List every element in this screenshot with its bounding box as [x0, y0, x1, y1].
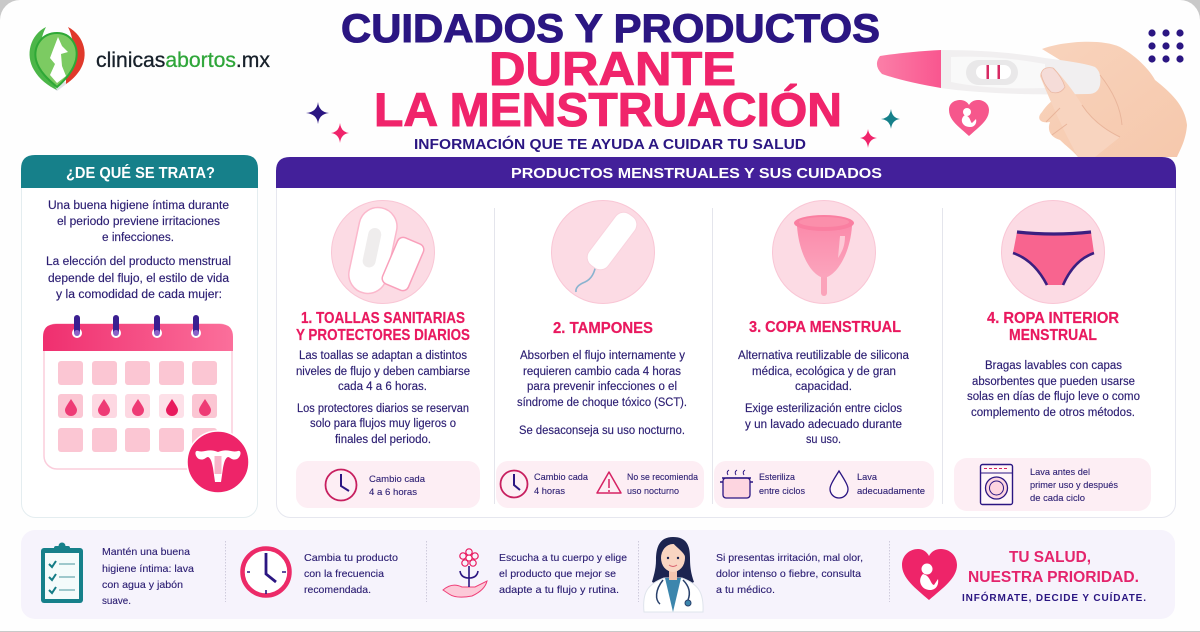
text: recomendada. — [304, 584, 371, 596]
text: higiene íntima: lava — [102, 563, 194, 575]
description: Bragas lavables con capas — [985, 360, 1122, 372]
tip chip: 4 horas — [534, 486, 565, 497]
heading: Y PROTECTORES DIARIOS — [296, 327, 470, 344]
icon: sanitary pad and liner — [332, 200, 434, 304]
description: absorbentes que pueden usarse — [972, 376, 1135, 388]
text — [102, 546, 194, 607]
product 4: ropa interior — [954, 200, 1151, 511]
tip chip: uso nocturno — [627, 486, 679, 497]
text: suave. — [102, 595, 131, 607]
description: Los protectores diarios se reservan — [297, 403, 469, 415]
text: con la frecuencia — [304, 568, 384, 580]
title: DURANTE — [489, 42, 736, 95]
tip: change product — [242, 548, 398, 596]
icon: heart with baby — [902, 549, 957, 600]
title: CUIDADOS Y PRODUCTOS — [341, 7, 880, 51]
title — [341, 7, 880, 136]
column separators — [494, 208, 942, 504]
text: a tu médico. — [716, 584, 775, 596]
heading — [987, 310, 1119, 344]
intro text: depende del flujo, el estilo de vida — [48, 273, 230, 285]
tip chip: No se recomienda — [627, 472, 699, 483]
icon: clipboard — [41, 542, 83, 603]
tip chip — [714, 461, 934, 508]
heading: 4. ROPA INTERIOR — [987, 310, 1119, 327]
tip chip — [296, 461, 480, 508]
panel: de que se trata — [21, 155, 258, 518]
intro text: y la comodidad de cada mujer: — [56, 289, 222, 301]
panel: bottom tips — [21, 530, 1175, 619]
text: dolor intenso o fiebre, consulta — [716, 568, 861, 580]
logo wordmark: clinicasabortos.mx — [96, 49, 271, 72]
tip chip: 4 a 6 horas — [369, 487, 417, 498]
heading — [296, 310, 470, 344]
product 1: toallas — [296, 200, 480, 508]
closing message — [902, 549, 1146, 604]
description: para prevenir infecciones o el — [527, 381, 677, 393]
intro text — [46, 200, 231, 301]
heading: 3. COPA MENSTRUAL — [749, 319, 901, 336]
tip: consult doctor — [644, 537, 863, 612]
tip chip: primer uso y después — [1030, 480, 1118, 491]
text: adapte a tu flujo y rutina. — [499, 584, 619, 596]
calendar — [43, 315, 233, 469]
icon: clock — [242, 548, 290, 596]
tip chip: Esteriliza — [759, 472, 796, 483]
product 3: copa — [714, 200, 934, 508]
panel header: PRODUCTOS MENSTRUALES Y SUS CUIDADOS — [511, 165, 882, 182]
description: capacidad. — [795, 381, 852, 393]
tip chip — [954, 458, 1151, 511]
tip chip: Cambio cada — [534, 472, 589, 483]
heading: 2. TAMPONES — [553, 320, 653, 337]
description: Las toallas se adaptan a distintos — [299, 350, 467, 362]
closing text: TU SALUD, — [1009, 549, 1091, 566]
description: cada 4 a 6 horas. — [338, 381, 427, 393]
icon: menstrual cup — [772, 200, 876, 304]
panel header: ¿DE QUÉ SE TRATA? — [66, 165, 215, 182]
tip: listen to body — [443, 549, 627, 597]
closing text: NUESTRA PRIORIDAD. — [968, 569, 1139, 586]
description — [967, 360, 1140, 419]
description: médica, ecológica y de gran — [752, 366, 896, 378]
text — [304, 552, 398, 596]
tip chip: adecuadamente — [857, 486, 925, 497]
intro text: el periodo previene irritaciones — [57, 216, 220, 228]
text: Escucha a tu cuerpo y elige — [499, 552, 627, 564]
panel: productos menstruales — [276, 157, 1176, 518]
intro text: e infecciones. — [102, 232, 174, 244]
description — [517, 350, 687, 437]
icon: heart with baby — [949, 100, 989, 136]
decorative dots — [1148, 29, 1184, 63]
intro text: Una buena higiene íntima durante — [48, 200, 229, 212]
heading: MENSTRUAL — [1009, 327, 1097, 344]
heading: 1. TOALLAS SANITARIAS — [301, 310, 465, 327]
description: solas en días de flujo leve o como — [967, 391, 1140, 403]
tip chip — [496, 461, 704, 508]
icon: doctor — [644, 537, 703, 612]
closing text: INFÓRMATE, DECIDE Y CUÍDATE. — [962, 591, 1146, 604]
description — [296, 350, 470, 446]
dividers — [226, 541, 890, 602]
description: su uso. — [806, 434, 841, 446]
tip chip: entre ciclos — [759, 486, 805, 497]
text — [716, 552, 863, 596]
tip chip: Lava antes del — [1030, 467, 1090, 478]
sparkles — [306, 102, 900, 148]
panel header — [21, 155, 258, 188]
text: Cambia tu producto — [304, 552, 398, 564]
description: solo para flujos muy ligeros o — [310, 418, 456, 430]
description: y un lavado adecuado durante — [745, 419, 902, 431]
description: Se desaconseja su uso nocturno. — [519, 425, 685, 437]
icon: uterus — [187, 431, 249, 493]
text: el producto que mejor se — [499, 568, 616, 580]
icon: period underwear — [1002, 200, 1104, 304]
description: complemento de otros métodos. — [971, 407, 1135, 419]
closing text — [962, 549, 1146, 604]
icon: hand with flower — [443, 549, 487, 597]
tip chip: Lava — [857, 472, 878, 483]
description: Exige esterilización entre ciclos — [745, 403, 902, 415]
text: Si presentas irritación, mal olor, — [716, 552, 863, 564]
text — [499, 552, 627, 596]
description: síndrome de choque tóxico (SCT). — [517, 397, 687, 409]
text: con agua y jabón — [102, 579, 183, 591]
description: Absorben el flujo internamente y — [520, 350, 685, 362]
description: Alternativa reutilizable de silicona — [738, 350, 910, 362]
product 2: tampones — [496, 200, 704, 508]
subtitle: INFORMACIÓN QUE TE AYUDA A CUIDAR TU SALUD — [414, 135, 806, 153]
description: finales del periodo. — [335, 434, 431, 446]
intro text: La elección del producto menstrual — [46, 256, 231, 268]
description: requieren cambio cada 4 horas — [523, 366, 681, 378]
tip: hygiene — [41, 542, 194, 607]
description — [738, 350, 910, 446]
icon: tampon — [552, 200, 654, 304]
logo — [30, 27, 85, 91]
panel header — [276, 157, 1176, 188]
text: Mantén una buena — [102, 546, 190, 558]
title: LA MENSTRUACIÓN — [374, 83, 842, 136]
icon: pregnancy test and hand — [877, 42, 1187, 157]
description: niveles de flujo y deben cambiarse — [296, 366, 470, 378]
tip chip: Cambio cada — [369, 474, 426, 485]
tip chip: de cada ciclo — [1030, 493, 1085, 504]
